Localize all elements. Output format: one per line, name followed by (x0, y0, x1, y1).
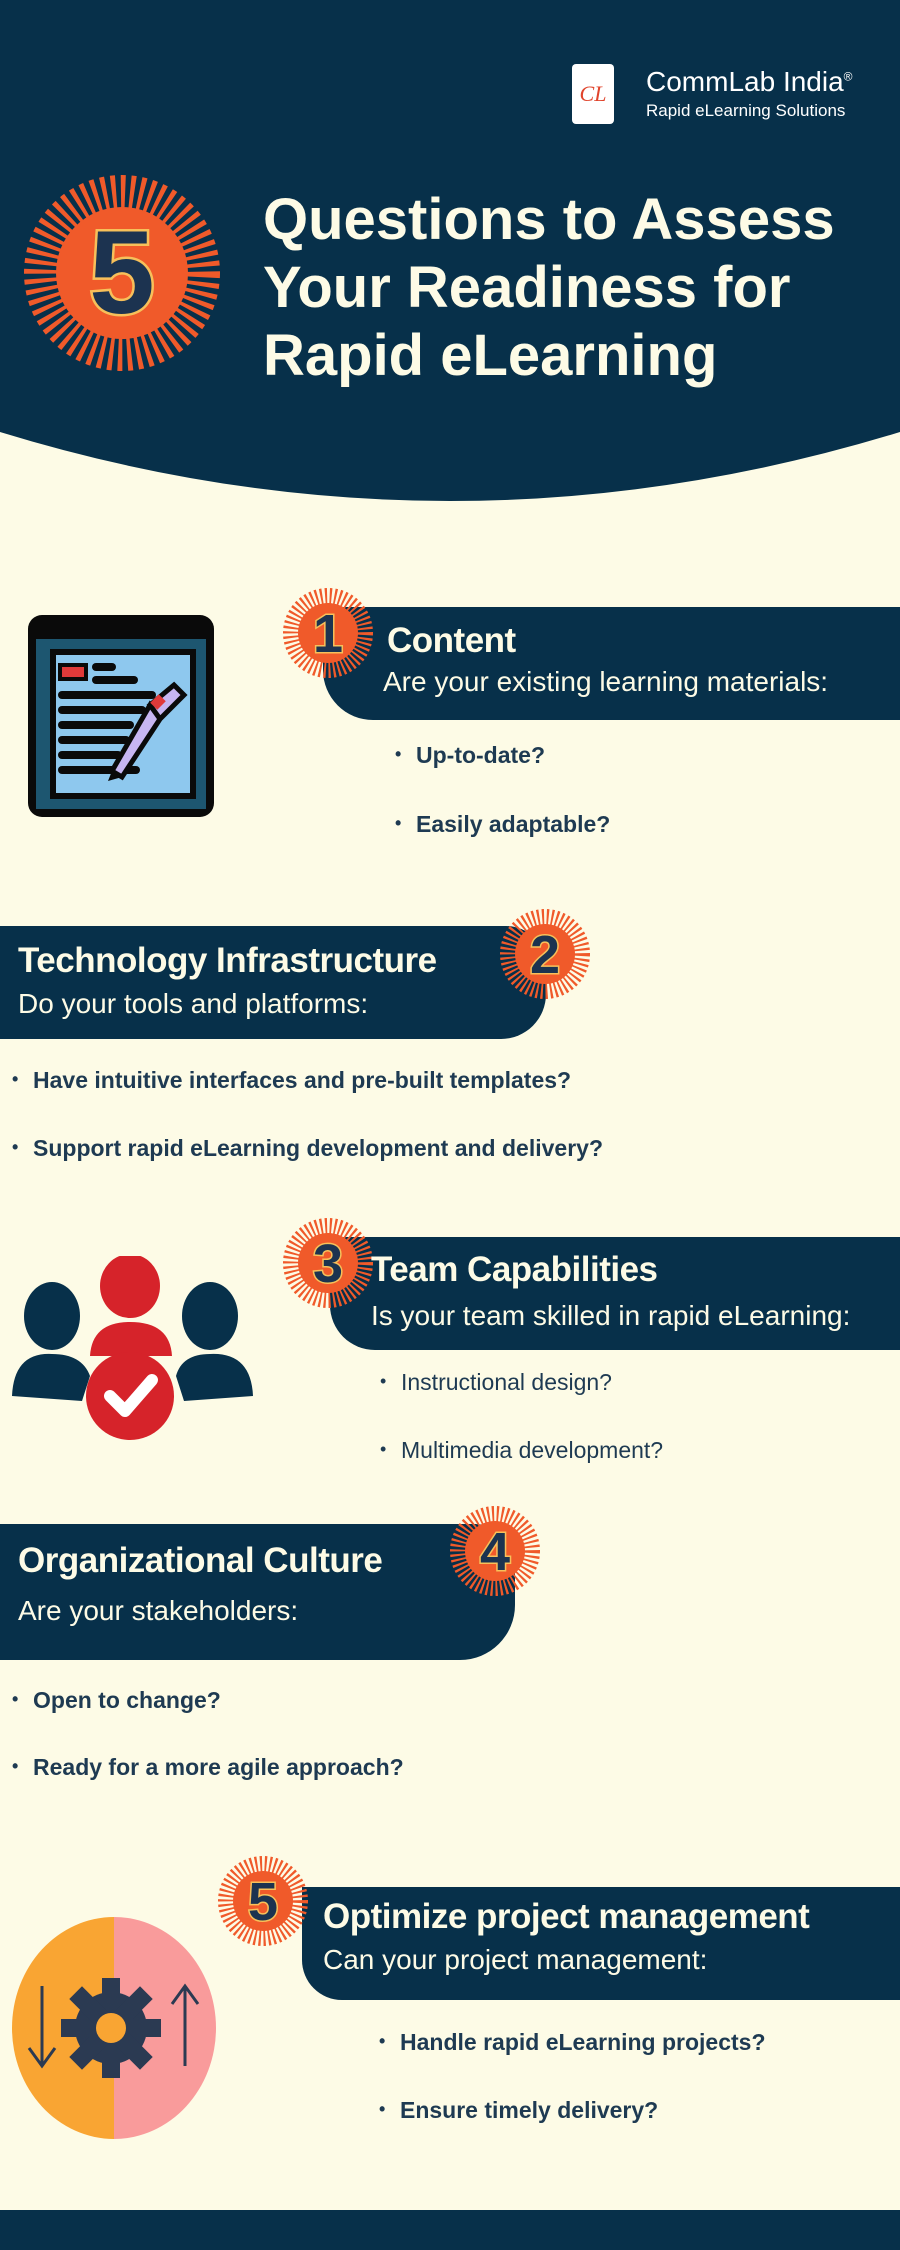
banner 1 (323, 607, 900, 720)
logo: Rapid eLearning Solutions (646, 101, 845, 120)
badge 2 (500, 909, 590, 999)
logo text: CommLab India® (646, 66, 852, 97)
footer bar (0, 2210, 900, 2250)
heading 5: Optimize project management (323, 1897, 809, 1936)
banner 4 (0, 1524, 515, 1660)
heading 2: Technology Infrastructure (18, 941, 437, 980)
title: Rapid eLearning (263, 323, 717, 388)
icon: document with pencil (28, 615, 214, 817)
bullets 4: Open to change? (33, 1687, 221, 1713)
panel: team: Is your team skilled in rapid eLearning: (371, 1300, 850, 1331)
header background (0, 0, 900, 501)
panel: technology: Support rapid eLearning development and delivery? (33, 1135, 603, 1161)
heading 4: Organizational Culture (18, 1541, 382, 1580)
panel: culture (0, 1506, 540, 1780)
panel: culture: Are your stakeholders: (18, 1595, 298, 1626)
panel: project management: Can your project management: (323, 1944, 707, 1975)
banner 5 (302, 1887, 900, 2000)
panel: team: Multimedia development? (401, 1437, 663, 1463)
bullets 1: Up-to-date? (416, 742, 545, 768)
badge 1: 1 (313, 604, 343, 664)
icon: big starburst 5 (24, 175, 220, 371)
icon: logo box (572, 64, 614, 124)
icon: logo box: CL (580, 81, 606, 106)
bullets 3: Instructional design? (401, 1369, 612, 1395)
icon: team people (12, 1256, 253, 1440)
badge 5 (218, 1856, 308, 1946)
bullets 2: Have intuitive interfaces and pre-built templates? (33, 1067, 571, 1093)
badge 4: 4 (480, 1522, 510, 1582)
badge 1 (283, 588, 373, 678)
bullets 5: Handle rapid eLearning projects? (400, 2029, 766, 2055)
badge 5: 5 (248, 1872, 278, 1932)
panel: team (12, 1218, 900, 1463)
heading 1: Content (387, 621, 516, 660)
banner 3 (330, 1237, 900, 1350)
title (263, 187, 835, 388)
badge 3: 3 (313, 1234, 343, 1294)
logo (572, 64, 852, 124)
title: Your Readiness for (263, 255, 790, 320)
badge 4 (450, 1506, 540, 1596)
panel: project management: Ensure timely delivery? (400, 2097, 658, 2123)
title: Questions to Assess (263, 187, 835, 252)
panel: project management (12, 1856, 900, 2139)
badge 3 (283, 1218, 373, 1308)
panel: content (28, 588, 900, 837)
panel: content: Are your existing learning materials: (383, 666, 828, 697)
badge 2: 2 (530, 925, 560, 985)
icon: gear circle (12, 1917, 216, 2139)
panel: technology: Do your tools and platforms: (18, 988, 368, 1019)
panel: content: Easily adaptable? (416, 811, 610, 837)
banner 2 (0, 926, 546, 1039)
panel: technology (0, 909, 603, 1161)
heading 3: Team Capabilities (371, 1250, 658, 1289)
panel: culture: Ready for a more agile approach? (33, 1754, 404, 1780)
icon: big starburst 5: 5 (89, 207, 155, 339)
